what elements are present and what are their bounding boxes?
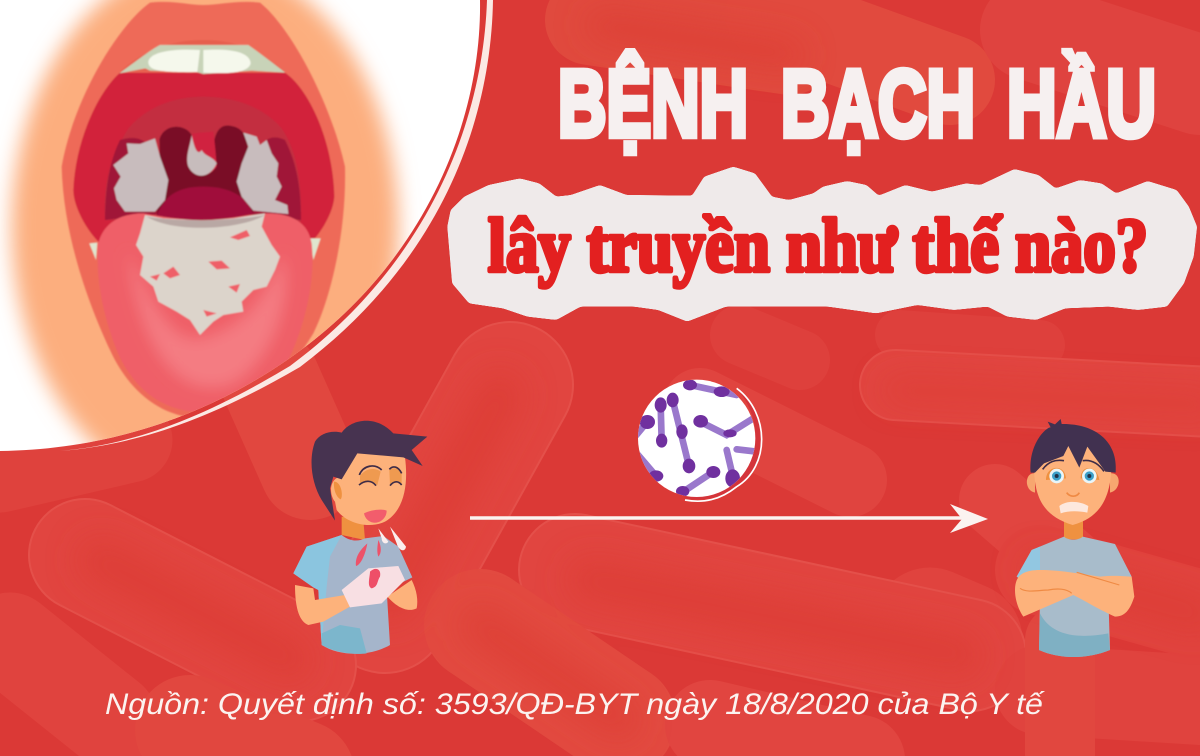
left tonsil membrane [113,138,168,212]
figure: frightened boy [1015,419,1134,657]
eye sockets [1046,468,1099,480]
microscope circle: diphtheria bacteria [635,380,762,501]
shirt [1017,537,1132,657]
bubble shape [447,167,1197,322]
spray drops [378,527,406,550]
mouth cavity [73,73,334,242]
subtitle bubble [447,167,1197,322]
hair [1030,419,1116,473]
upper teeth [119,45,285,74]
uvula [187,132,217,175]
title [558,51,1156,157]
eye shadows [360,468,402,485]
blood stain [369,569,380,588]
right tonsil membrane [237,133,288,214]
ear [334,482,342,499]
face [331,452,406,525]
blood drips [356,540,381,566]
title: BẠCH [781,51,975,157]
illustration: open mouth with diphtheria membrane [12,0,398,493]
left arm [295,585,350,625]
eyes closed [359,466,402,486]
lips [62,2,345,418]
shirt [293,535,412,654]
tongue coating [136,213,280,335]
source note: Nguồn: Quyết định số: 3593/QĐ-BYT ngày 18/8/2020 của Bộ Y tế [105,688,1045,721]
figure: sick boy coughing blood [293,421,427,654]
side teeth [89,238,321,260]
teeth [1059,502,1088,513]
nose [1067,493,1079,496]
ears [1027,473,1119,493]
eyes [1049,469,1097,483]
lesions [150,230,250,317]
transmission arrow [470,504,988,533]
title: BỆNH [558,51,748,157]
open mouth [364,510,387,523]
neck [342,517,365,540]
tissue [342,566,405,607]
neck [1064,513,1083,539]
right arm [387,580,417,610]
hair [312,421,427,521]
decorative white curve [60,0,493,451]
face [1034,440,1112,525]
tongue [98,213,312,412]
soft palate [105,97,301,222]
brows [1043,460,1104,471]
throat [157,126,253,217]
skin halo [12,0,398,493]
upper lip inner shade [128,40,233,72]
white corner panel [0,0,480,451]
crossed arms [1015,570,1134,617]
